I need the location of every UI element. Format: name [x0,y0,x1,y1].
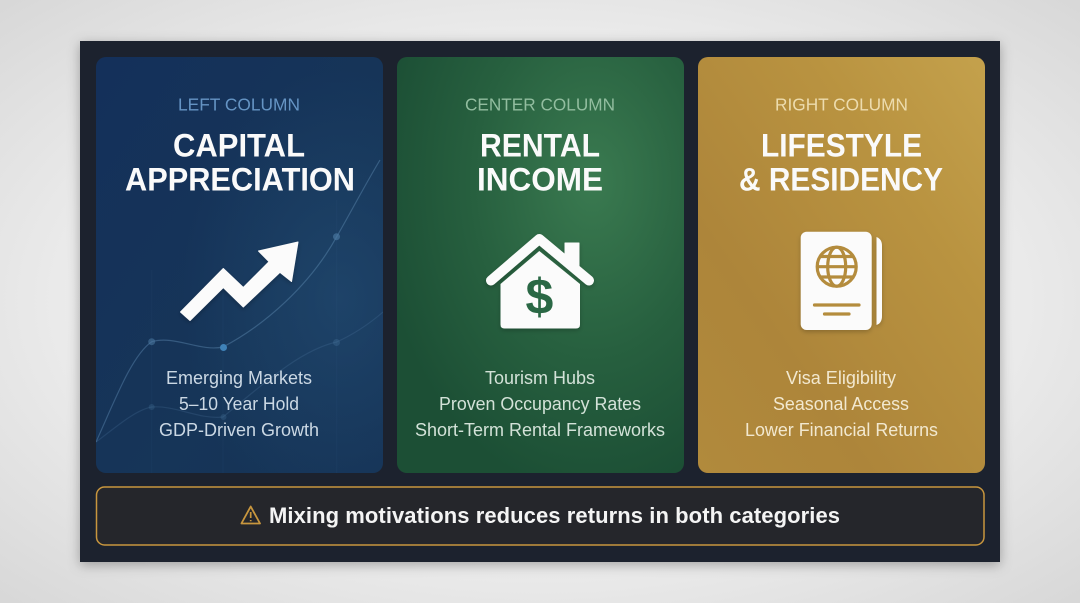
warning message: Mixing motivations reduces returns in both categories [269,503,840,528]
heading [125,128,355,198]
heading: INCOME [477,162,603,198]
callout: warning banner [96,487,984,545]
feature list: Lower Financial Returns [745,420,938,440]
feature list: 5–10 Year Hold [179,394,299,414]
feature list [415,368,665,440]
feature list [745,368,938,440]
heading: RENTAL [480,128,600,164]
panel: rental income [397,57,684,473]
heading: LIFESTYLE [761,128,922,164]
heading: & RESIDENCY [739,162,943,198]
heading [477,128,603,198]
icon: warning triangle [241,506,260,524]
feature list: Visa Eligibility [786,368,896,388]
column label: RIGHT COLUMN [775,94,908,114]
feature list: Proven Occupancy Rates [439,394,641,414]
heading: APPRECIATION [125,162,355,198]
feature list: Emerging Markets [166,368,312,388]
feature list: Seasonal Access [773,394,909,414]
feature list [159,368,319,440]
panel: lifestyle and residency [698,57,985,473]
icon: house with dollar sign: $ [526,269,554,325]
icon: house with dollar sign [491,239,589,328]
background line chart [96,160,383,473]
icon: passport [801,232,882,330]
column label: CENTER COLUMN [465,94,615,114]
heading [739,128,943,198]
heading: CAPITAL [173,128,305,164]
icon: rising arrow [180,242,298,320]
feature list: Tourism Hubs [485,368,595,388]
main dark panel [80,41,1000,562]
feature list: Short-Term Rental Frameworks [415,420,665,440]
feature list: GDP-Driven Growth [159,420,319,440]
column label: LEFT COLUMN [178,94,300,114]
panel: capital appreciation [96,57,383,473]
